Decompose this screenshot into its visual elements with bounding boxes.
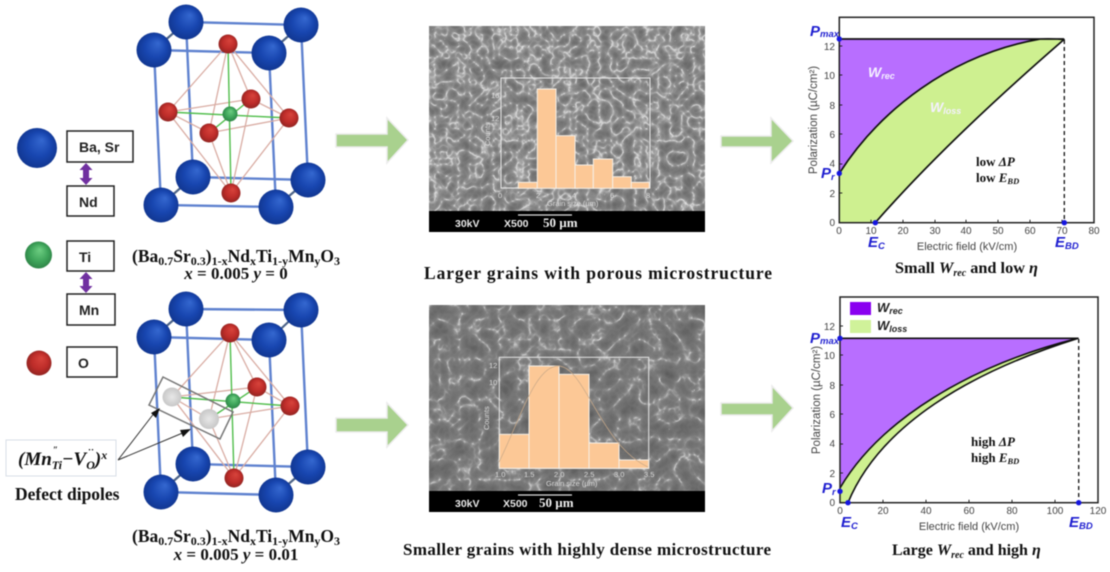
scale bar text: 50 µm xyxy=(539,495,574,510)
markers and blue labels: E xyxy=(841,514,851,531)
histogram: grain size, bottom sample: 2.5 xyxy=(584,470,594,479)
label: Nd: Nd xyxy=(79,194,98,210)
histogram: grain size, top sample: 16 xyxy=(491,91,499,100)
formula: top composition: O xyxy=(320,246,334,266)
caption: bottom chart: rec xyxy=(951,550,964,561)
callout: defect dipole formula and arrows: x xyxy=(100,448,107,462)
tick labels: 30 xyxy=(929,226,941,237)
caption: bottom microstructure: Smaller grains with highly dense microstructure xyxy=(403,540,771,559)
histogram: grain size, bottom sample: 12 xyxy=(489,361,497,370)
legend: energy areas: rec xyxy=(889,306,903,316)
callout: defect dipole formula and arrows: −V xyxy=(62,449,88,470)
tick labels: 100 xyxy=(1047,506,1064,517)
annotation: high delta P and high EBD: high ΔP xyxy=(971,434,1016,449)
tick labels: 80 xyxy=(1006,506,1018,517)
histogram: grain size, top sample: 2 xyxy=(536,191,540,200)
formula: top composition: y xyxy=(314,254,320,268)
histogram: grain size, top sample: 8 xyxy=(646,191,650,200)
icon: Ti atom xyxy=(25,242,52,268)
label: Ti xyxy=(67,241,114,271)
panel: bottom SEM micrograph xyxy=(429,305,705,512)
spheres: oxygen, titanium and vacancy sites xyxy=(162,324,300,488)
formula: bottom composition: Mn xyxy=(288,526,315,546)
formula: bottom composition: O xyxy=(320,526,334,546)
icon: Ba Sr atom xyxy=(17,128,57,168)
caption: top chart: rec xyxy=(953,268,967,279)
markers and blue labels: P xyxy=(821,165,831,182)
callout: defect dipole formula and arrows: (Mn xyxy=(18,449,52,470)
histogram: grain size, top sample xyxy=(483,78,650,208)
tick labels xyxy=(824,322,1107,517)
label: Mn: Mn xyxy=(79,302,99,318)
markers and blue labels xyxy=(810,23,1079,252)
formula: top composition: (Ba xyxy=(132,246,158,266)
scale bar text: 30kV xyxy=(455,218,480,230)
formula: bottom composition xyxy=(132,526,340,564)
tick labels: 6 xyxy=(829,410,835,421)
spheres: back A-site atoms xyxy=(168,4,326,198)
histogram: grain size, top sample: Counts xyxy=(483,122,492,146)
histogram: grain size, bottom sample: Counts xyxy=(482,406,491,430)
spheres: back A-site atoms xyxy=(168,292,326,484)
formula: top composition: 1-x xyxy=(212,254,228,268)
formula: bottom composition: x xyxy=(250,534,256,548)
histogram: grain size, top sample: 12 xyxy=(491,114,499,123)
caption: bottom chart: and high xyxy=(964,542,1032,559)
chart: bottom hysteresis loop xyxy=(810,297,1107,533)
histogram: grain size, bottom sample: 10 xyxy=(489,378,497,387)
label: Mn xyxy=(67,294,115,325)
annotation: low delta P and low EBD: low E xyxy=(976,170,1007,185)
spheres: front A-site atoms xyxy=(136,32,294,224)
markers and blue labels: max xyxy=(820,29,840,40)
formula: bottom composition: x = 0.005 y = 0.01 xyxy=(173,545,298,564)
area labels: W xyxy=(930,99,943,115)
annotation: high delta P and high EBD xyxy=(971,434,1019,466)
formula: top composition xyxy=(132,246,340,283)
markers and blue labels: max xyxy=(820,336,840,347)
formula: bottom composition: 0.7 xyxy=(158,534,173,548)
formula: bottom composition: (Ba xyxy=(132,526,158,546)
histogram: grain size, top sample: 6 xyxy=(610,191,614,200)
tick labels: 120 xyxy=(1090,506,1107,517)
tick labels xyxy=(824,42,1100,237)
tick labels: 10 xyxy=(865,226,877,237)
callout: defect dipole formula and arrows: Ti xyxy=(52,458,63,472)
legend: energy areas: W xyxy=(877,318,889,333)
legend: energy areas xyxy=(850,300,907,334)
formula: bottom composition: Ti xyxy=(256,526,272,546)
caption: bottom chart: Large W xyxy=(892,542,951,559)
annotation: low delta P and low EBD xyxy=(976,154,1019,186)
area: recoverable energy xyxy=(840,338,1078,488)
histogram: grain size, top sample: 4 xyxy=(572,191,576,200)
markers and blue labels: C xyxy=(878,241,885,252)
formula: top composition: 0.3 xyxy=(191,254,206,268)
tick labels: 20 xyxy=(897,226,909,237)
histogram: grain size, bottom sample: Grain size (µm) xyxy=(546,479,598,488)
defect dipole highlight box xyxy=(149,377,233,439)
histogram: grain size, bottom sample xyxy=(482,357,654,488)
callout: defect dipole formula and arrows: O xyxy=(86,458,95,472)
callout: defect dipole formula and arrows: ″ xyxy=(53,445,58,455)
area: energy loss xyxy=(839,39,1064,223)
icon: O atom xyxy=(26,350,52,376)
tick labels: 40 xyxy=(960,226,972,237)
callout: defect dipole formula and arrows xyxy=(6,408,191,476)
scale bar text xyxy=(455,495,574,510)
formula: top composition: 1-y xyxy=(272,254,288,268)
crystal structure: undoped Mn xyxy=(136,4,326,224)
tick labels: 40 xyxy=(920,506,932,517)
tick labels: 8 xyxy=(829,101,835,112)
scale bar text xyxy=(455,215,578,230)
markers and blue labels: r xyxy=(831,172,836,183)
formula: bottom composition: 1-y xyxy=(272,534,288,548)
label: Nd xyxy=(67,186,114,216)
tick labels: 0 xyxy=(829,218,835,229)
label: Ba, Sr xyxy=(67,131,133,162)
formula: top composition: Sr xyxy=(173,246,191,266)
histogram: grain size, bottom sample: 1.0 xyxy=(495,470,505,479)
arrow: top microstructure to hysteresis xyxy=(721,118,793,163)
axis titles: Polarization (µC/cm²) xyxy=(811,346,823,454)
formula: top composition: ) xyxy=(206,246,212,266)
axis titles xyxy=(808,66,1017,253)
markers and blue labels xyxy=(810,330,1093,532)
legend: atom key xyxy=(17,128,133,377)
axis titles: Electric field (kV/cm) xyxy=(917,241,1017,253)
histogram: grain size, bottom sample: 3.5 xyxy=(644,470,654,479)
formula: top composition: 3 xyxy=(334,254,340,268)
tick labels: 12 xyxy=(824,322,835,333)
markers and blue labels: P xyxy=(810,23,820,40)
callout: defect dipole formula and arrows: ·· xyxy=(88,445,94,455)
tick labels: 50 xyxy=(992,226,1004,237)
area labels: loss xyxy=(943,106,961,116)
chart: top hysteresis loop xyxy=(808,17,1100,253)
area labels: rec xyxy=(881,71,895,81)
markers and blue labels: BD xyxy=(1065,241,1079,252)
formula: top composition: x = 0.005 y = 0 xyxy=(183,264,288,283)
tick labels: 12 xyxy=(824,42,835,53)
tick labels: 4 xyxy=(829,159,835,170)
caption: top chart: and low xyxy=(966,258,1029,277)
arrow: top structure to microstructure xyxy=(336,118,408,163)
formula: bottom composition: ) xyxy=(206,526,212,546)
formula: bottom composition: 3 xyxy=(334,534,340,548)
formula: bottom composition: Sr xyxy=(173,526,191,546)
caption: top chart: η xyxy=(1029,258,1038,277)
formula: bottom composition: 1-x xyxy=(212,534,228,548)
scale bar text: X500 xyxy=(503,498,528,510)
scale bar text: 50 µm xyxy=(543,215,578,230)
formula: top composition: x xyxy=(250,254,256,268)
tick labels: 60 xyxy=(1024,226,1036,237)
legend: energy areas: loss xyxy=(889,324,907,334)
area labels xyxy=(868,64,961,116)
markers and blue labels: BD xyxy=(1079,521,1093,532)
formula: top composition: Ti xyxy=(256,246,272,266)
markers and blue labels: P xyxy=(810,330,820,347)
tick labels: 10 xyxy=(824,71,835,82)
formula: bottom composition: 0.3 xyxy=(191,534,206,548)
area: recoverable energy xyxy=(839,39,1040,173)
spheres: front A-site atoms xyxy=(136,320,294,512)
legend: energy areas: W xyxy=(877,300,889,315)
histogram: grain size, bottom sample: 1.5 xyxy=(524,470,534,479)
markers and blue labels: E xyxy=(868,234,878,251)
tick labels: 2 xyxy=(829,189,835,200)
area: energy loss xyxy=(840,338,1078,503)
caption: top chart: Small W xyxy=(895,258,953,277)
label: Defect dipoles: Defect dipoles xyxy=(15,484,120,504)
annotation: low delta P and low EBD: BD xyxy=(1006,176,1019,186)
histogram: grain size, top sample: 0 xyxy=(498,191,502,200)
tick labels: 80 xyxy=(1088,226,1100,237)
tick labels: 10 xyxy=(824,351,835,362)
label: Ba, Sr: Ba, Sr xyxy=(79,139,120,155)
axis titles: Polarization (µC/cm²) xyxy=(808,66,820,174)
panel: top SEM micrograph xyxy=(429,26,705,232)
markers and blue labels: P xyxy=(822,480,832,497)
arrow: Ba Sr to Nd substitution xyxy=(80,163,92,185)
tick labels: 6 xyxy=(829,130,835,141)
callout: defect dipole formula and arrows: ) xyxy=(93,449,101,470)
spheres: oxygen and titanium atoms xyxy=(158,34,298,202)
axis titles: Electric field (kV/cm) xyxy=(919,521,1019,533)
crystal structure: Mn-doped with defect dipoles xyxy=(136,292,326,512)
area labels: W xyxy=(868,64,881,80)
tick labels: 4 xyxy=(829,439,835,450)
formula: bottom composition: Nd xyxy=(228,526,250,546)
arrow: bottom structure to microstructure xyxy=(336,403,408,447)
scale bar text: 30kV xyxy=(455,498,480,510)
tick labels: 0 xyxy=(829,498,835,509)
arrow: bottom microstructure to hysteresis xyxy=(721,386,793,431)
scale bar text: X500 xyxy=(504,218,529,230)
markers and blue labels: E xyxy=(1069,514,1079,531)
caption: bottom chart: η xyxy=(1032,542,1041,559)
caption: top microstructure: Larger grains with porous microstructure xyxy=(424,263,772,283)
histogram: grain size, top sample: Grain size (µm) xyxy=(547,199,599,208)
label: Ti: Ti xyxy=(79,249,91,265)
label: O xyxy=(67,347,117,377)
formula: top composition: 0.7 xyxy=(158,254,173,268)
axis titles xyxy=(811,346,1019,533)
label: O: O xyxy=(78,355,89,371)
formula: top composition: Mn xyxy=(288,246,315,266)
arrow: Ti to Mn substitution xyxy=(80,272,92,293)
markers and blue labels: E xyxy=(1055,234,1065,251)
markers and blue labels: C xyxy=(851,521,858,532)
histogram: grain size, bottom sample: 3.0 xyxy=(614,470,624,479)
tick labels: 0 xyxy=(836,226,842,237)
formula: bottom composition: y xyxy=(314,534,320,548)
markers and blue labels: r xyxy=(832,487,837,498)
tick labels: 60 xyxy=(963,506,975,517)
annotation: low delta P and low EBD: low ΔP xyxy=(976,154,1016,169)
tick labels: 70 xyxy=(1056,226,1068,237)
annotation: high delta P and high EBD: BD xyxy=(1006,456,1019,466)
tick labels: 2 xyxy=(829,469,835,480)
formula: top composition: Nd xyxy=(228,246,250,266)
tick labels: 0 xyxy=(837,506,843,517)
tick labels: 8 xyxy=(829,381,835,392)
histogram: grain size, bottom sample: 2.0 xyxy=(554,470,564,479)
annotation: high delta P and high EBD: high E xyxy=(971,450,1008,465)
tick labels: 20 xyxy=(877,506,889,517)
